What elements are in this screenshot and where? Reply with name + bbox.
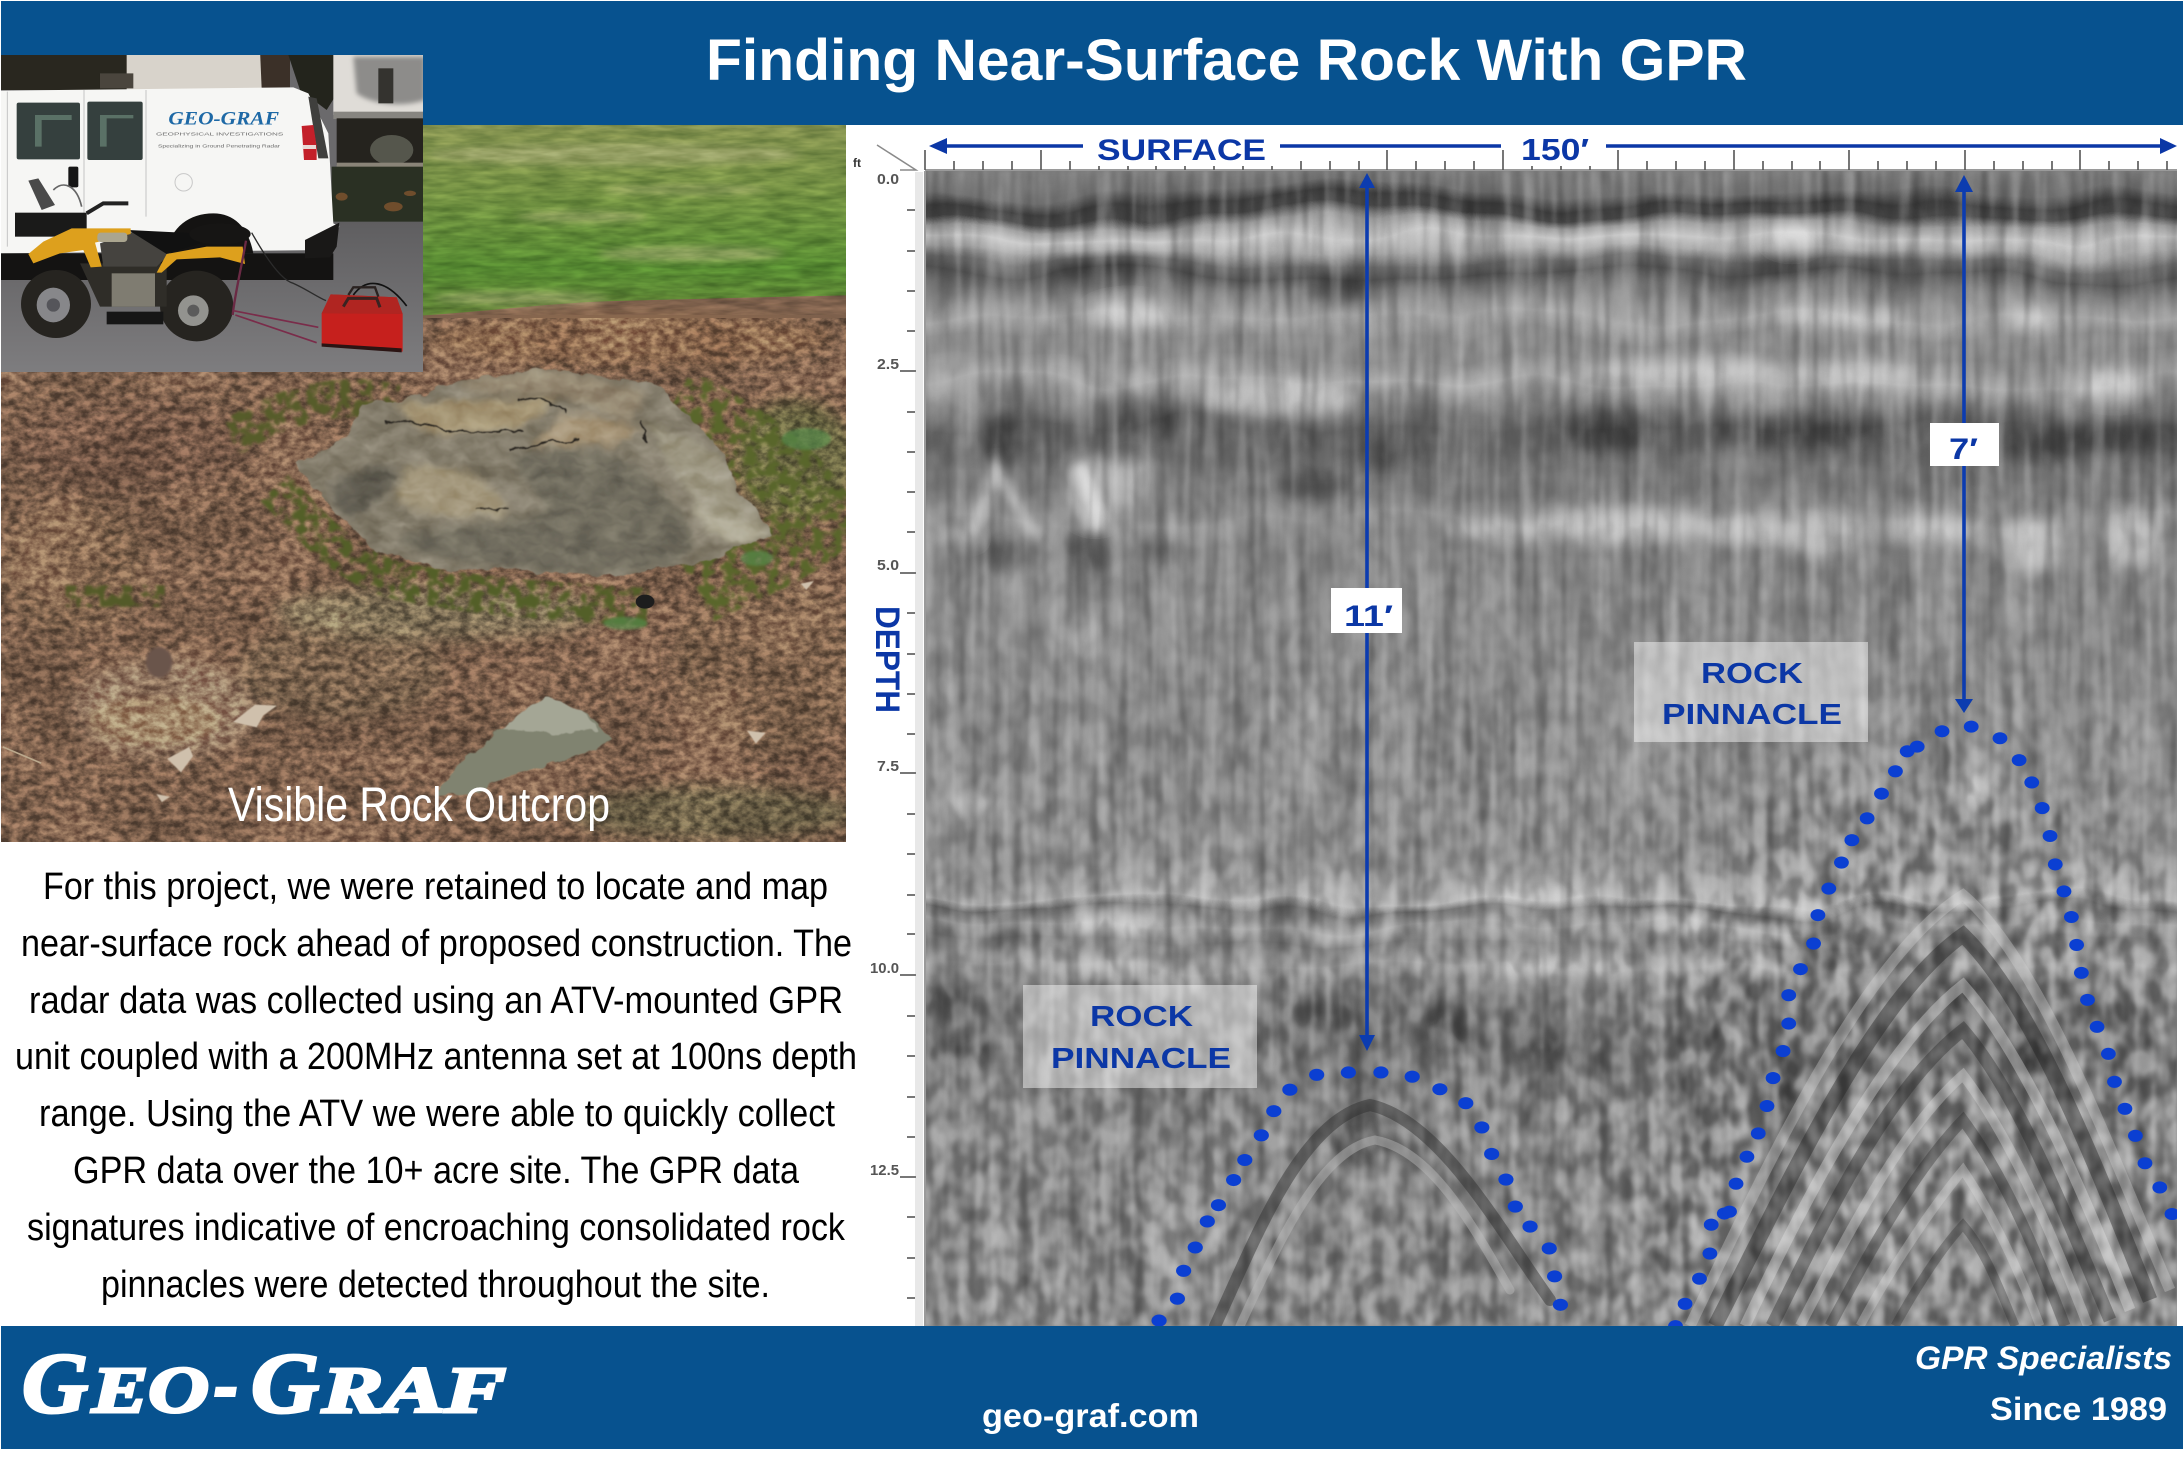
callout: left rock pinnacle: [1023, 985, 1257, 1088]
panel: field photograph of rock outcrop: [0, 125, 861, 842]
logo: Geo-Graf: [22, 1335, 506, 1431]
project description text block: For this project, we were retained to locate and map: [43, 866, 828, 908]
panel: inset van and ATV photograph: [0, 50, 425, 373]
ATV wheels: [21, 270, 91, 338]
depth scale: 2.5: [877, 356, 899, 373]
cable coil: [189, 223, 251, 245]
callout: left rock pinnacle: ROCK: [1090, 1001, 1193, 1033]
red GPR unit: [322, 294, 403, 352]
ATV yellow fenders: [28, 228, 131, 267]
depth scale: 0.0: [877, 171, 899, 188]
depth scale: 7.5: [877, 758, 899, 775]
title: Finding Near-Surface Rock With GPR: [706, 28, 1747, 93]
depth arrow: 7 feet: 7′: [1949, 433, 1978, 466]
tow cables: [233, 233, 407, 343]
radar trace striations: [925, 170, 2177, 1326]
project description text block: near-surface rock ahead of proposed construction. The: [21, 923, 852, 965]
dotted outline: left rock pinnacle: [1151, 1066, 1568, 1327]
fallen leaves: [156, 581, 814, 802]
depth arrow: 7 feet: [1930, 175, 1999, 713]
callout: right rock pinnacle: [1634, 642, 1868, 742]
van body: [0, 87, 339, 253]
background house and trees: [1, 55, 127, 90]
surface distance annotation: 150′: [1521, 132, 1589, 167]
website: geo-graf.com: [982, 1397, 1199, 1434]
surface distance annotation: [929, 132, 2177, 167]
grass and soil texture: [423, 125, 846, 315]
footer banner: [1, 1326, 2183, 1449]
project description text block: range. Using the ATV we were able to quickly collect: [39, 1093, 835, 1135]
surface distance annotation: SURFACE: [1097, 134, 1266, 167]
dotted outline: right rock pinnacle: [1668, 721, 2179, 1332]
project description text block: signatures indicative of encroaching consolidated rock: [27, 1207, 846, 1249]
hyperbola chevrons under right pinnacle: [1690, 895, 2170, 1326]
hyperbola arcs under left pinnacle: [1215, 1105, 1550, 1326]
van logo: Specializing in Ground Penetrating Radar: [158, 143, 281, 148]
project description text block: [15, 866, 857, 1306]
logo: Geo-Graf: G: [22, 1335, 88, 1431]
tagline: GPR Specialists: [1915, 1340, 2172, 1376]
ATV frame and engine: [80, 263, 167, 307]
ground tones: [0, 312, 861, 840]
panel: GPR radar profile: [880, 130, 2183, 1360]
van door lines: [7, 90, 146, 247]
depth arrow: 11 feet: 11′: [1344, 600, 1393, 633]
callout: left rock pinnacle: PINNACLE: [1051, 1043, 1231, 1075]
pavement: [0, 222, 425, 373]
ATV rear rack and laptop: [28, 178, 55, 210]
depth scale: 10.0: [870, 960, 899, 977]
van windows: [17, 103, 80, 159]
logo: Geo-Graf: EO: [91, 1354, 209, 1427]
secondary rock: [433, 696, 613, 797]
small brown stone: [146, 647, 172, 678]
main rock outcrop: [291, 363, 784, 580]
logo: Geo-Graf: RAF: [321, 1354, 506, 1427]
horizontal distance scale ticks: [925, 150, 2167, 170]
depth scale: ft: [853, 156, 861, 170]
callout: right rock pinnacle: PINNACLE: [1662, 699, 1842, 731]
moss ring around outcrop: [66, 398, 823, 607]
project description text block: radar data was collected using an ATV-mounted GPR: [29, 980, 843, 1022]
black fitting on ground: [636, 595, 654, 609]
mirror: [68, 167, 78, 187]
van wheel and bumper: [167, 213, 253, 253]
tagline: [1915, 1340, 2172, 1427]
project description text block: unit coupled with a 200MHz antenna set at 100ns depth: [15, 1036, 857, 1078]
van logo: GEO-GRAF: [168, 109, 279, 130]
ATV seat: [128, 230, 200, 254]
depth axis label: DEPTH: [868, 606, 906, 713]
depth arrow: 11 feet: [1331, 173, 1402, 1051]
rock cracks: [384, 398, 645, 509]
van logo: [156, 109, 283, 148]
radar frame edges: [925, 170, 2177, 1326]
logo: Geo-Graf: G: [251, 1335, 319, 1431]
logo: Geo-Graf: -: [214, 1335, 238, 1431]
header banner: [1, 1, 2183, 125]
radar speckle texture: [925, 170, 2177, 1326]
bright chevron reflector: [974, 467, 1098, 530]
photo caption: Visible Rock Outcrop: [228, 779, 610, 832]
depth scale: [853, 145, 916, 1298]
grass field: [422, 125, 847, 315]
project description text block: pinnacles were detected throughout the site.: [101, 1264, 770, 1306]
depth scale: 5.0: [877, 557, 899, 574]
van logo: GEOPHYSICAL INVESTIGATIONS: [156, 131, 283, 136]
callout: right rock pinnacle: ROCK: [1701, 658, 1803, 690]
dirt patch: [96, 699, 212, 740]
radar anomalies: [918, 225, 2183, 1162]
depth scale: 12.5: [870, 1162, 899, 1179]
tagline: Since 1989: [1990, 1391, 2167, 1427]
project description text block: GPR data over the 10+ acre site. The GPR data: [73, 1150, 800, 1192]
